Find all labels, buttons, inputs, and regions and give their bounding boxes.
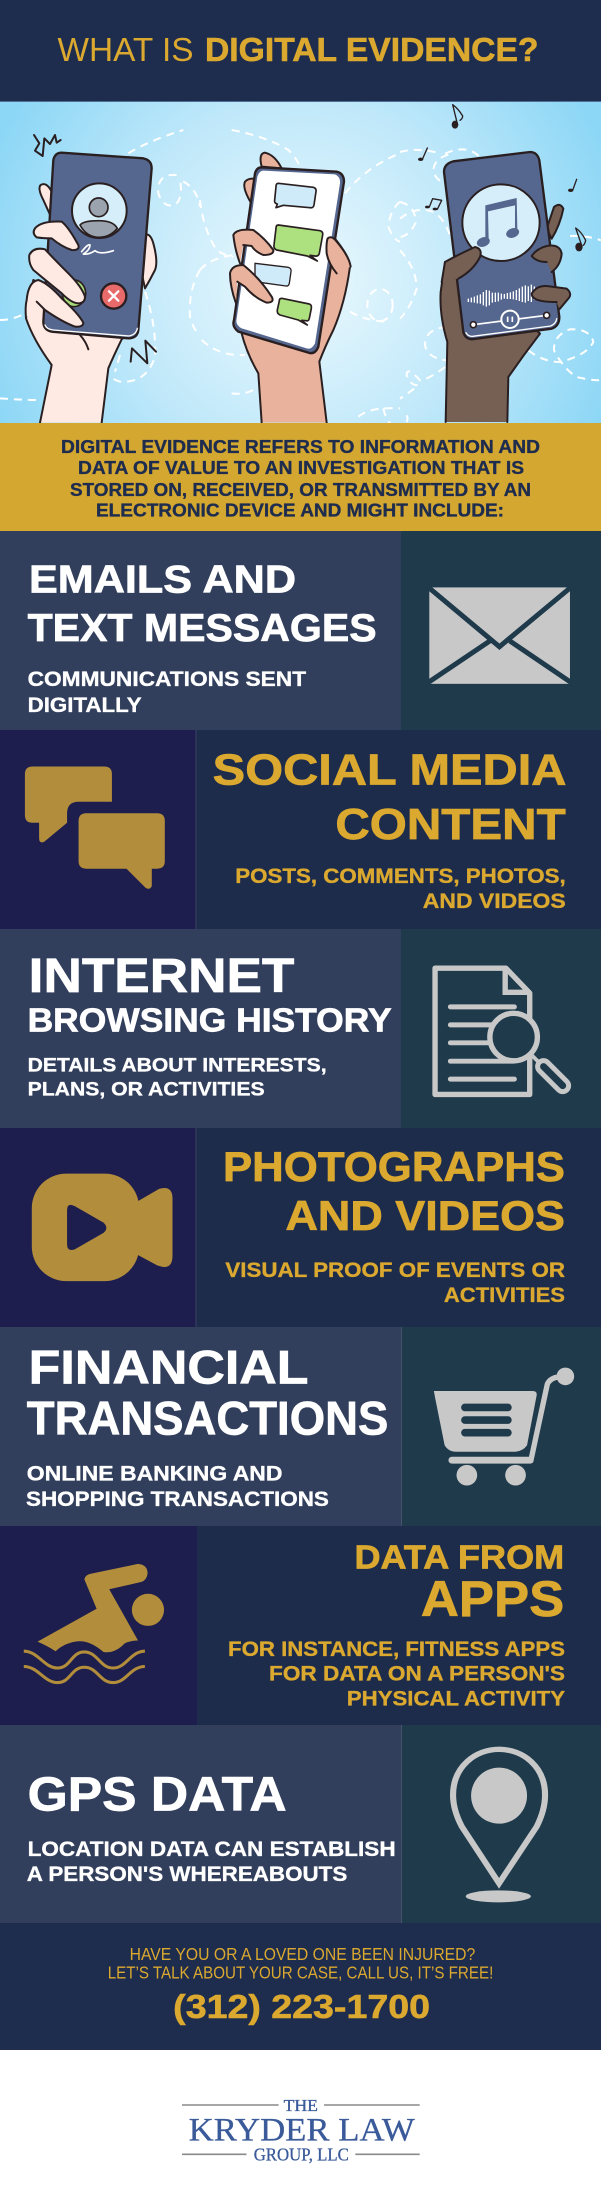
call to action text: LET’S TALK ABOUT YOUR CASE, CALL US, IT’S FREE! (108, 1963, 493, 1983)
description: VISUAL PROOF OF EVENTS OR (225, 1259, 565, 1282)
icon: map pin (453, 1749, 545, 1902)
description: FOR DATA ON A PERSON'S (269, 1663, 565, 1686)
heading (223, 1143, 565, 1239)
panel: financial transactions (0, 1327, 601, 1526)
call to action text (108, 1944, 493, 1983)
heading: TEXT MESSAGES (28, 607, 377, 650)
description: COMMUNICATIONS SENT (28, 668, 306, 691)
heading: EMAILS AND (29, 558, 296, 602)
description (228, 1638, 565, 1710)
intro text (61, 437, 540, 520)
description: PLANS, OR ACTIVITIES (28, 1079, 265, 1101)
illustration: three hands holding phones (0, 102, 601, 423)
heading: CONTENT (335, 801, 566, 849)
description: AND VIDEOS (423, 890, 566, 913)
heading: APPS (421, 1571, 564, 1627)
panel: gps data (0, 1725, 601, 1923)
logo text: THE (284, 2096, 318, 2115)
description: A PERSON'S WHEREABOUTS (27, 1862, 347, 1886)
panel: internet browsing history (0, 929, 601, 1128)
description (235, 865, 566, 913)
panel: emails and text messages (0, 531, 601, 730)
title: WHAT IS (58, 31, 194, 68)
heading: TRANSACTIONS (27, 1393, 388, 1446)
intro band (0, 423, 601, 531)
heading: PHOTOGRAPHS (223, 1143, 565, 1190)
icon: video camera (32, 1174, 172, 1281)
description (27, 1837, 396, 1886)
description: PHYSICAL ACTIVITY (347, 1688, 565, 1710)
heading: INTERNET (29, 949, 295, 1003)
description: DETAILS ABOUT INTERESTS, (28, 1054, 327, 1076)
description (225, 1259, 565, 1307)
icon: envelope (426, 585, 573, 684)
description: DIGITALLY (28, 694, 142, 717)
description (28, 668, 306, 717)
intro text: ELECTRONIC DEVICE AND MIGHT INCLUDE: (96, 500, 504, 520)
icon: document with magnifier (435, 968, 563, 1094)
panel: data from apps (0, 1526, 601, 1726)
heading: SOCIAL MEDIA (213, 746, 566, 794)
logo text: KRYDER LAW (189, 2113, 416, 2149)
title: DIGITAL EVIDENCE? (205, 31, 538, 68)
description: POSTS, COMMENTS, PHOTOS, (235, 865, 566, 888)
right hand with music player phone (400, 105, 601, 422)
heading (213, 746, 566, 849)
icon: chat bubbles (25, 767, 165, 889)
description (28, 1054, 327, 1101)
heading: DATA FROM (354, 1538, 564, 1576)
call to action text: HAVE YOU OR A LOVED ONE BEEN INJURED? (130, 1944, 476, 1964)
description: LOCATION DATA CAN ESTABLISH (28, 1837, 396, 1861)
panel: social media content (0, 730, 601, 930)
left hand with incoming call phone (0, 130, 200, 423)
logo text: GROUP, LLC (254, 2145, 349, 2165)
intro text: DATA OF VALUE TO AN INVESTIGATION THAT IS (78, 458, 524, 478)
heading (27, 1341, 388, 1446)
icon: shopping cart (434, 1368, 574, 1485)
heading: GPS DATA (28, 1768, 287, 1822)
description: ACTIVITIES (444, 1284, 565, 1307)
panel: photographs and videos (0, 1128, 601, 1327)
description (26, 1462, 329, 1511)
heading: AND VIDEOS (286, 1192, 565, 1239)
intro text: STORED ON, RECEIVED, OR TRANSMITTED BY AN (70, 480, 531, 500)
intro text: DIGITAL EVIDENCE REFERS TO INFORMATION AND (61, 437, 540, 457)
description: FOR INSTANCE, FITNESS APPS (228, 1638, 565, 1661)
centre hand with messages phone (200, 130, 400, 423)
heading: BROWSING HISTORY (28, 1001, 392, 1038)
heading (28, 949, 392, 1038)
call to action (0, 1923, 601, 2050)
logo: the kryder law group (0, 2050, 601, 2210)
logo text (189, 2096, 416, 2165)
heading (354, 1538, 564, 1627)
icon: swimmer (24, 1564, 164, 1683)
phone number: (312) 223-1700 (173, 1988, 430, 2025)
description: ONLINE BANKING AND (27, 1462, 282, 1486)
description: SHOPPING TRANSACTIONS (26, 1488, 329, 1511)
heading (28, 558, 377, 650)
title banner (0, 0, 601, 102)
heading: FINANCIAL (29, 1341, 308, 1394)
